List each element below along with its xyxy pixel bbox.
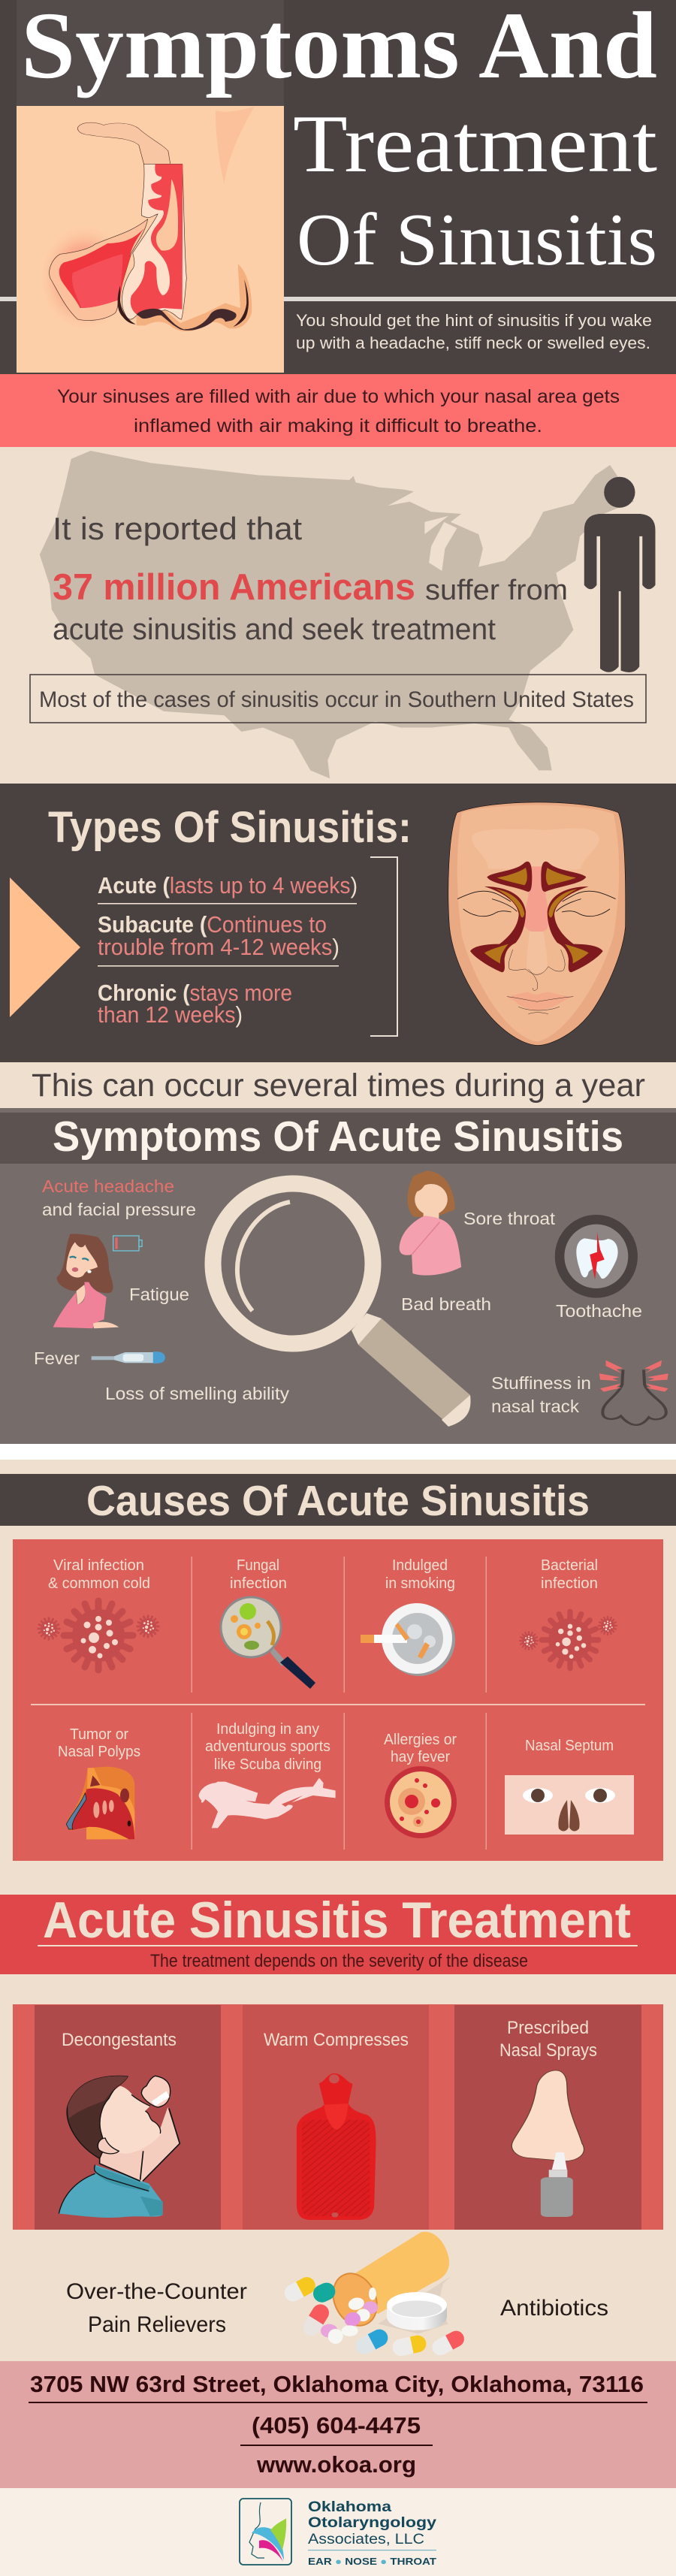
cause labels: adventurous sports xyxy=(205,1738,330,1755)
treatment labels: Nasal Sprays xyxy=(499,2040,597,2061)
list of types: Acute (lasts up to 4 weeks) xyxy=(98,872,358,898)
symptom labels xyxy=(34,1176,642,1416)
panel: treatments xyxy=(13,2004,663,2230)
panel: causes of acute sinusitis xyxy=(0,1474,676,1861)
symptom labels: Bad breath xyxy=(401,1294,491,1314)
text: suffer from: suffer from xyxy=(425,575,568,606)
intro text: You should get the hint of sinusitis if you wake xyxy=(296,311,652,330)
cause labels: like Scuba diving xyxy=(214,1756,321,1773)
panel: pink statement band: inflamed with air making it difficult to breathe. xyxy=(134,415,542,436)
symptom labels: Sore throat xyxy=(463,1209,556,1228)
panel: acute sinusitis treatment heading xyxy=(0,1892,676,1974)
panel: symptoms of acute sinusitis xyxy=(0,1108,676,1444)
map of United States xyxy=(40,451,634,778)
text: occurs several times: This can occur several times during a year xyxy=(32,1068,645,1104)
cause labels: Indulged xyxy=(392,1557,448,1574)
icon: woman with sore throat xyxy=(400,1170,461,1276)
logo icon xyxy=(240,2499,291,2565)
icon: fungal magnifier xyxy=(221,1597,315,1689)
symptom labels: Fever xyxy=(34,1348,80,1368)
logo text: Associates, LLC xyxy=(308,2532,424,2547)
heading: Causes Of Acute Sinusitis xyxy=(86,1477,590,1525)
panel: types of sinusitis xyxy=(0,784,676,1062)
cause labels: Fungal xyxy=(237,1557,279,1574)
panel: contact details: www.okoa.org xyxy=(256,2451,416,2478)
bracket xyxy=(370,857,397,1036)
illustration: hot water bottle xyxy=(297,2073,376,2220)
illustration: face with sinuses xyxy=(448,802,626,1046)
icon: thermometer xyxy=(92,1351,165,1363)
cause labels: Bacterial xyxy=(541,1557,598,1574)
icon: toothache xyxy=(555,1215,638,1298)
icon: scuba diver xyxy=(199,1778,336,1828)
title line 2: Treatment xyxy=(293,98,657,189)
symptom labels: Stuffiness in xyxy=(491,1373,591,1393)
icon: stuffy nose xyxy=(599,1360,668,1425)
icon: magnifying glass xyxy=(213,1184,470,1427)
text: over the counter: Pain Relievers xyxy=(88,2312,226,2337)
panel: acute sinusitis treatment heading: The treatment depends on the severity of the disease xyxy=(150,1951,528,1971)
list of types: trouble from 4-12 weeks) xyxy=(98,934,340,960)
treatment labels: Prescribed xyxy=(507,2018,589,2038)
panel: contact details xyxy=(0,2361,676,2488)
cause labels: infection xyxy=(541,1575,598,1592)
white gap strip xyxy=(0,1444,676,1460)
cause labels: in smoking xyxy=(385,1575,455,1592)
panel: contact details: 3705 NW 63rd Street, Oklahoma City, Oklahoma, 73116 xyxy=(30,2371,644,2397)
cause labels: Nasal Septum xyxy=(525,1738,614,1754)
cause labels xyxy=(48,1557,614,1773)
text: antibiotics: Antibiotics xyxy=(500,2296,608,2321)
callout: southern states: Most of the cases of sinusitis occur in Southern United States xyxy=(39,687,634,712)
text: acute sinusitis: acute sinusitis and seek treatment xyxy=(53,613,496,646)
heading: Types Of Sinusitis: xyxy=(48,803,412,852)
illustration: spilled pills bottle xyxy=(282,2232,467,2358)
arrow triangle xyxy=(10,877,80,1017)
illustration: nose cross-section xyxy=(17,106,284,373)
panel: contact details: (405) 604-4475 xyxy=(252,2412,421,2439)
list of types: Subacute (Continues to xyxy=(98,911,327,938)
symptom labels: Fatigue xyxy=(129,1285,189,1304)
panel: logo footer xyxy=(0,2488,676,2576)
text: it is reported: It is reported that xyxy=(53,511,302,546)
cause labels: Allergies or xyxy=(384,1732,457,1748)
logo text: Oklahoma xyxy=(308,2499,392,2515)
icon: allergy skin xyxy=(385,1766,457,1838)
icon: tired woman with battery xyxy=(53,1234,142,1328)
great lakes xyxy=(424,516,457,571)
icon: ashtray xyxy=(361,1603,455,1676)
panel: pink statement band: Your sinuses are filled with air due to which your nasal area gets xyxy=(57,386,620,407)
cause labels: Indulging in any xyxy=(216,1721,319,1738)
panel: pink statement band xyxy=(0,374,676,447)
cause labels: hay fever xyxy=(391,1749,450,1765)
intro text xyxy=(296,311,652,352)
symptom labels: Toothache xyxy=(556,1301,642,1321)
text: over the counter: Over-the-Counter xyxy=(66,2279,247,2304)
icon: nasal septum xyxy=(505,1775,634,1835)
text: 37 million: 37 million Americans xyxy=(53,567,415,608)
icon: bacterial virus xyxy=(520,1611,617,1669)
illustration: man pinching nose xyxy=(59,2076,180,2218)
panel: acute sinusitis treatment heading: Acute Sinusitis Treatment xyxy=(43,1892,631,1949)
text: over the counter xyxy=(66,2279,247,2337)
panel: statistics with US map xyxy=(30,451,655,778)
cause labels: Tumor or xyxy=(70,1726,128,1743)
logo text xyxy=(308,2499,437,2567)
intro text: up with a headache, stiff neck or swelled eyes. xyxy=(296,334,650,352)
callout: southern states xyxy=(30,675,646,723)
logo text: EAR ● NOSE ● THROAT xyxy=(308,2556,436,2567)
treatment labels: Decongestants xyxy=(62,2030,177,2050)
title line 3: Of Sinusitis xyxy=(297,199,657,281)
list of types xyxy=(98,872,358,1028)
symptom labels: nasal track xyxy=(491,1397,580,1416)
icon: nasal polyps xyxy=(66,1767,134,1839)
cause labels: & common cold xyxy=(48,1575,150,1592)
panel: header xyxy=(0,0,676,374)
logo text: Otolaryngology xyxy=(308,2515,437,2531)
cause labels: Nasal Polyps xyxy=(58,1744,140,1760)
symptom labels: Loss of smelling ability xyxy=(105,1384,290,1403)
icon: person xyxy=(584,477,655,672)
heading: Symptoms Of Acute Sinusitis xyxy=(53,1113,623,1161)
symptom labels: Acute headache xyxy=(42,1176,174,1196)
list of types: than 12 weeks) xyxy=(98,1001,243,1028)
treatment labels xyxy=(62,2018,597,2061)
red causes panel xyxy=(13,1539,663,1861)
list of types: Chronic (stays more xyxy=(98,980,292,1006)
cause labels: Viral infection xyxy=(53,1557,144,1574)
treatment labels: Warm Compresses xyxy=(264,2030,409,2050)
symptom labels: and facial pressure xyxy=(42,1200,196,1219)
illustration: nose with spray xyxy=(512,2070,584,2217)
cause labels: infection xyxy=(230,1575,287,1592)
icon: viral virus xyxy=(38,1601,158,1670)
